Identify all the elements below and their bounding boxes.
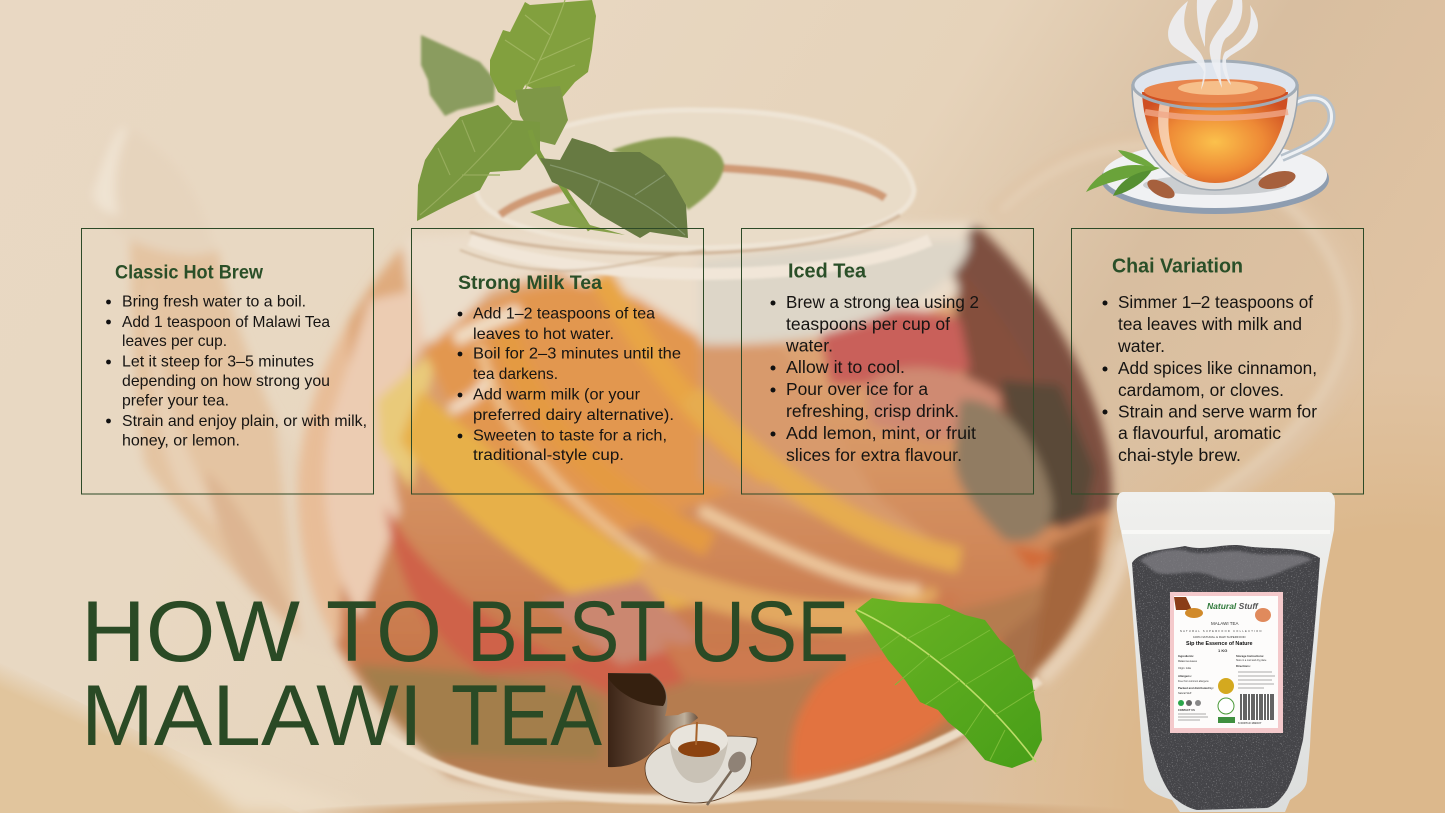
- teapot handle: [995, 142, 1356, 560]
- bullet list: honey, or lemon.: [122, 432, 240, 450]
- label text: Packed and distributed by:: [1178, 686, 1214, 690]
- glass bowl: [1132, 85, 1298, 190]
- bullet list: Add 1 teaspoon of Malawi Tea: [122, 314, 330, 331]
- tea stream: [696, 722, 697, 745]
- teapot base rim highlight: [385, 680, 1040, 800]
- bullet list: [458, 306, 681, 464]
- heading: Chai Variation: [1112, 254, 1243, 278]
- top leaf: [490, 0, 596, 103]
- tea leaves inside: [1132, 545, 1320, 810]
- title: HOW: [81, 584, 300, 680]
- label text: Natural Stuff: [1178, 692, 1192, 695]
- label text: 1 KG: [1218, 648, 1227, 653]
- cup rim: [1133, 61, 1297, 109]
- label text: Free from common allergens: [1178, 680, 1209, 683]
- bullet list: preferred dairy alternative).: [473, 407, 674, 424]
- saucer: [645, 736, 757, 803]
- barcode: 6 009710 182037: [1238, 721, 1262, 725]
- bullet list: Bring fresh water to a boil.: [122, 294, 306, 310]
- label text: Store in a cool and dry place: [1236, 659, 1267, 662]
- bullet list: teaspoons per cup of: [786, 314, 950, 334]
- bullet list: traditional-style cup.: [473, 447, 624, 464]
- back left leaf: [421, 35, 495, 116]
- label text: Malawi tea leaves: [1178, 660, 1198, 663]
- title: MALAWI: [81, 668, 423, 764]
- small leaf inside rim: [530, 203, 625, 235]
- label logo and illustrations: [1174, 597, 1271, 622]
- bullet list: leaves to hot water.: [473, 326, 614, 343]
- teapot opening rim: [460, 110, 930, 274]
- lower right leaf: [540, 138, 688, 238]
- bullet list: Add 1–2 teaspoons of tea: [473, 306, 655, 322]
- bullet list: [106, 294, 367, 450]
- bullet list: Strain and serve warm for: [1118, 402, 1317, 422]
- stem: [530, 130, 590, 230]
- pouch body: [1117, 492, 1335, 812]
- icon: pouring teapot and cup: [608, 673, 757, 805]
- label text: Allergens:: [1178, 674, 1192, 678]
- bullet list: Add spices like cinnamon,: [1118, 358, 1317, 378]
- bullet list: cardamom, or cloves.: [1118, 380, 1284, 400]
- bullet list: refreshing, crisp drink.: [786, 401, 959, 421]
- panel: classic hot brew: [82, 228, 374, 494]
- icon: bottom mint leaf: [855, 598, 1042, 768]
- mint sprig in teapot: [417, 0, 724, 238]
- product label: [1170, 592, 1283, 733]
- bullet list: slices for extra flavour.: [786, 445, 962, 465]
- label text: Ingredients:: [1178, 654, 1194, 658]
- heading: Classic Hot Brew: [115, 262, 263, 284]
- tea: [1142, 92, 1288, 183]
- label text: 100% NATURAL & RAW SUPERFOOD: [1193, 635, 1246, 639]
- icon: tea cup with steam: [1086, 0, 1332, 214]
- label text: NATURAL SUPERFOOD COLLECTION: [1180, 629, 1263, 633]
- label text: [1178, 621, 1267, 712]
- title: TEA: [451, 668, 603, 764]
- bullet list: Let it steep for 3–5 minutes: [122, 354, 314, 370]
- panel: chai variation: [1072, 228, 1364, 494]
- bullet list: Brew a strong tea using 2: [786, 292, 979, 312]
- bullet list: [770, 292, 979, 465]
- cup: [670, 729, 728, 783]
- label text: Directions:: [1236, 664, 1251, 668]
- spoon: [707, 770, 732, 805]
- label text: CONTACT US: [1178, 708, 1195, 712]
- bullet list: Sweeten to taste for a rich,: [473, 428, 667, 444]
- tea liquid and fruit slices: [294, 220, 1119, 796]
- bullet list: [1102, 292, 1317, 465]
- title: USE: [689, 584, 849, 680]
- contact icons: [1178, 700, 1201, 706]
- teapot glass body: [410, 170, 970, 510]
- bullet list: water.: [785, 336, 833, 356]
- lower left leaf: [417, 105, 540, 221]
- bullet list: leaves per cup.: [122, 333, 227, 350]
- bullet list: prefer your tea.: [122, 392, 229, 410]
- bullet list: Add lemon, mint, or fruit: [786, 423, 976, 443]
- back right leaf: [612, 137, 724, 210]
- cup handle: [1282, 98, 1332, 158]
- bullet list: chai-style brew.: [1118, 445, 1241, 465]
- heading: Iced Tea: [788, 260, 867, 282]
- heading: Strong Milk Tea: [458, 273, 602, 294]
- title: BEST: [467, 584, 666, 680]
- steam: [1168, 0, 1258, 90]
- barcode: [1238, 694, 1274, 725]
- label text: MALAWI TEA: [1211, 621, 1239, 626]
- bullet list: tea darkens.: [473, 366, 558, 383]
- bullet list: tea leaves with milk and: [1118, 314, 1302, 334]
- bullet list: a flavourful, aromatic: [1118, 423, 1281, 443]
- panel: strong milk tea: [412, 228, 704, 494]
- label text: Storage Instructions:: [1236, 654, 1264, 658]
- bullet list: Allow it to cool.: [786, 357, 905, 377]
- label logo and illustrations: Natural Stuff: [1207, 601, 1259, 611]
- organic badge: [1218, 698, 1235, 723]
- bullet list: Add warm milk (or your: [473, 386, 640, 404]
- saucer: [1101, 142, 1329, 214]
- centre leaf cluster: [515, 86, 568, 145]
- label text: Origin: India: [1178, 667, 1192, 670]
- bullet list: Strain and enjoy plain, or with milk,: [122, 413, 367, 430]
- bullet list: Boil for 2–3 minutes until the: [473, 346, 681, 362]
- product: malawi tea pouch: [1117, 492, 1335, 812]
- teapot spout: [90, 122, 350, 660]
- cropped teapot: [608, 673, 698, 767]
- gold seal: [1218, 678, 1234, 694]
- bullet list: water.: [1117, 336, 1165, 356]
- bullet list: Pour over ice for a: [786, 379, 928, 399]
- tea in cup: [678, 741, 720, 757]
- leaves and spice: [1086, 150, 1297, 202]
- label text: Sip the Essence of Nature: [1186, 641, 1253, 647]
- panel: iced tea: [742, 228, 1034, 494]
- bullet list: Simmer 1–2 teaspoons of: [1118, 292, 1313, 312]
- bullet list: depending on how strong you: [122, 373, 330, 390]
- title: [81, 584, 849, 764]
- title: TO: [326, 584, 442, 680]
